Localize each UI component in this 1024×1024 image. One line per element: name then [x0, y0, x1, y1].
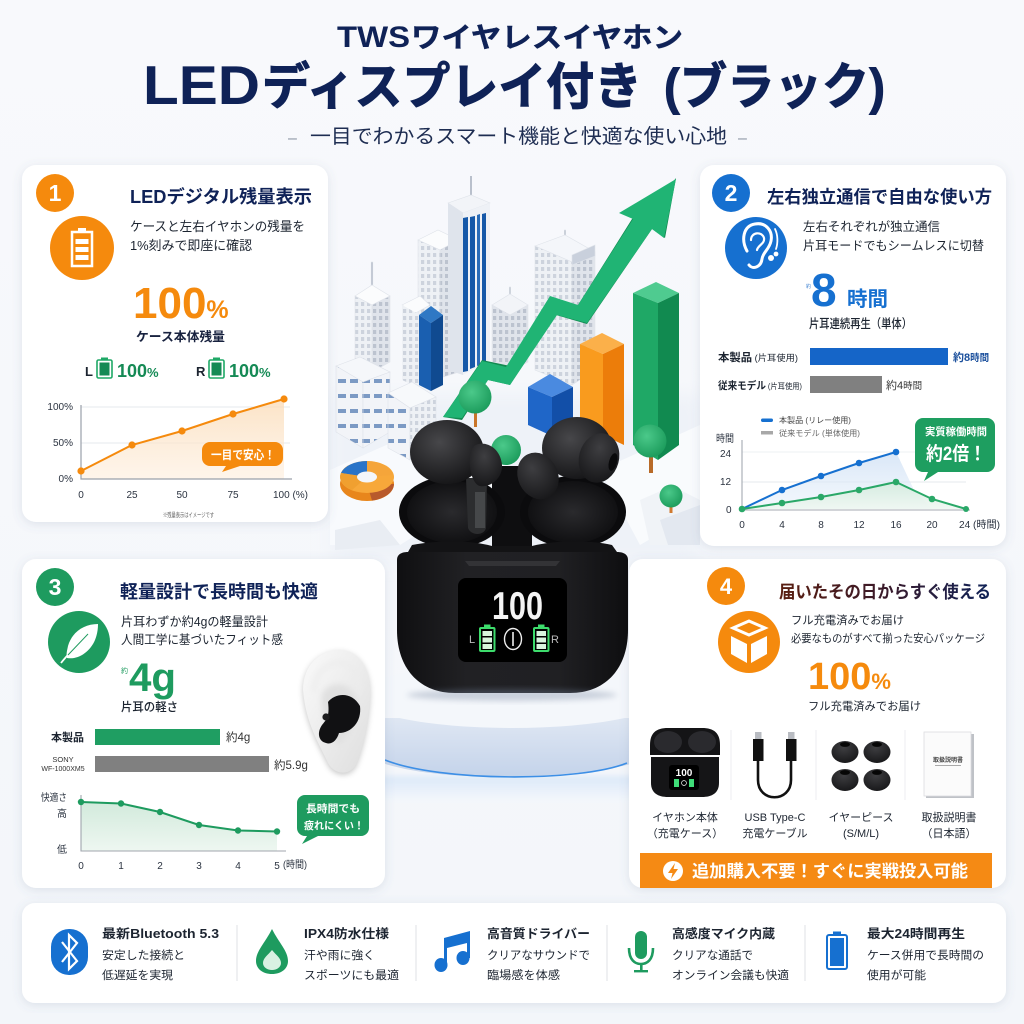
callout 2: 約2倍！: [926, 443, 986, 465]
product: earbuds and charging case: [397, 417, 628, 701]
item: ear tips: [832, 741, 890, 791]
mid tower: [492, 287, 528, 372]
callout 3: 疲れにくい！: [304, 819, 364, 832]
item labels: イヤホン本体: [652, 810, 718, 824]
feature: Bluetooth: 最新Bluetooth 5.3: [102, 926, 219, 941]
LED display: L: [469, 634, 475, 646]
badge 3: 3: [49, 574, 61, 600]
description 2: 左右それぞれが独立通信: [803, 219, 940, 234]
title line 2: ディスプレイ付き: [262, 59, 642, 115]
icon: microphone: [629, 931, 653, 972]
growth arrow: [443, 178, 676, 420]
line chart 2: 24: [720, 449, 732, 460]
icon: lightning: [663, 861, 683, 881]
description 2: 片耳モードでもシームレスに切替: [803, 239, 984, 253]
stat: 100%: 100%: [133, 279, 229, 328]
illustration: ear with earbud: [303, 650, 370, 773]
badge 1: 1: [49, 180, 62, 206]
line chart 1: 75: [227, 490, 239, 501]
feature: waterproof: [256, 926, 400, 982]
line chart 3: 0: [78, 861, 84, 872]
stat label: ケース本体残量: [136, 329, 225, 344]
tree 3: [660, 484, 682, 513]
line chart 2: 0: [739, 520, 745, 531]
line chart 3: 快適さ: [41, 791, 67, 804]
line chart 1: 25: [126, 490, 138, 501]
divider: [606, 925, 608, 981]
description 4: フル充電済みでお届け: [791, 614, 904, 627]
icon: feather: [48, 611, 110, 673]
description 1: 1%刻みで即座に確認: [130, 238, 252, 253]
icon: water drop: [256, 929, 288, 974]
divider: [804, 925, 806, 981]
feature: audio driver: 臨場感を体感: [487, 968, 561, 982]
line chart 2: 20: [926, 520, 938, 531]
bar comparison 2: [718, 348, 989, 393]
callout 2: 実質稼働時間: [925, 425, 987, 438]
line chart 1: 0%: [59, 474, 73, 485]
callout 1: [202, 442, 283, 472]
line chart 3: 2: [157, 861, 163, 872]
tree 1: [458, 380, 492, 427]
big right tower: [535, 230, 595, 385]
bar comparison 2: 約8時間: [953, 350, 989, 364]
feature: waterproof: IPX4防水仕様: [304, 926, 390, 941]
tall blue tower: [448, 176, 490, 375]
left battery: [480, 624, 494, 651]
central city illustration: [330, 176, 700, 560]
line chart 1: 100 (%): [273, 490, 308, 501]
badge 2: 2: [725, 180, 737, 206]
left and right battery readout: 100%: [117, 361, 159, 381]
stat: 8 hours: [806, 264, 888, 316]
stat: 8 hours: 約: [806, 283, 811, 290]
heading 3: 軽量設計で長時間も快適: [120, 582, 318, 602]
bar comparison 3: 本製品: [51, 730, 84, 744]
heading 1: LEDデジタル残量表示: [130, 186, 312, 207]
tree 2: [634, 424, 666, 473]
line chart 3: 5: [274, 861, 280, 872]
feature: Bluetooth: 安定した接続と: [102, 948, 185, 962]
legend: 従来モデル (単体使用): [779, 428, 860, 438]
stat label 4: フル充電済みでお届け: [808, 700, 921, 713]
tower behind: [418, 230, 459, 378]
feature: waterproof: スポーツにも最適: [304, 968, 400, 982]
stat: 4g: 4g: [129, 656, 176, 700]
item labels: 充電ケーブル: [742, 826, 808, 840]
title line 1: ワイヤレスイヤホン: [411, 22, 683, 53]
item labels: （充電ケース）: [647, 827, 723, 840]
legend: 本製品 (リレー使用): [779, 415, 851, 425]
legend: [761, 415, 860, 438]
case lid: [399, 466, 626, 552]
subtitle: 一目でわかるスマート機能と快適な使い心地: [310, 125, 727, 148]
item: manual: 取扱説明書: [933, 756, 963, 764]
icon: battery: [827, 932, 847, 969]
orange bar: [580, 333, 624, 445]
item: earbud case: 100: [676, 768, 693, 779]
left and right battery readout: 100%: [229, 361, 271, 381]
left earbud: [410, 420, 502, 534]
divider: [730, 730, 732, 800]
feature: battery life: 使用が可能: [867, 968, 927, 982]
feature: battery life: ケース併用で長時間の: [867, 948, 984, 962]
stat label 2: 片耳連続再生（単体）: [809, 316, 912, 331]
subtitle: –: [288, 130, 297, 147]
badge 4: 4: [720, 574, 733, 599]
line chart 2: 16: [890, 520, 902, 531]
line chart 1: 0: [78, 490, 84, 501]
left and right battery readout: R: [196, 364, 206, 379]
title line 1: TWS: [337, 21, 410, 54]
footnote: ※残量表示はイメージです: [163, 510, 214, 519]
panel 1: LED digital battery display: [22, 165, 328, 522]
banner: 追加購入不要！すぐに実戦投入可能: [692, 861, 968, 881]
line chart 2: 12: [853, 520, 865, 531]
line chart 2: 8: [818, 520, 824, 531]
bottom feature bar: [22, 903, 1006, 1003]
line chart 2: [716, 415, 1000, 531]
feature: Bluetooth: [51, 926, 219, 982]
stat: 4g: 約: [121, 666, 128, 675]
feature: audio driver: クリアなサウンドで: [487, 949, 590, 962]
divider: [415, 925, 417, 981]
bar comparison 3: [41, 729, 308, 773]
tower with blue block: [402, 296, 443, 391]
icon: bluetooth: [51, 929, 88, 975]
feature: Bluetooth: 低遅延を実現: [102, 969, 174, 982]
tree 4: [491, 435, 521, 465]
green bar: [633, 282, 679, 460]
left and right battery readout: [85, 358, 271, 381]
stat: 8 hours: 8: [811, 264, 837, 316]
stat: 100%: 100%: [808, 656, 891, 698]
callout 3: [297, 795, 369, 844]
callout 2: [915, 418, 995, 481]
ground: [330, 395, 700, 560]
line chart 2: 12: [720, 477, 732, 488]
feature: waterproof: 汗や雨に強く: [304, 949, 375, 962]
feature: audio driver: 高音質ドライバー: [487, 926, 590, 941]
line chart 2: 0: [726, 505, 732, 516]
item labels: （日本語）: [922, 826, 976, 840]
description 3: 人間工学に基づいたフィット感: [121, 632, 283, 647]
callout 3: 長時間でも: [306, 802, 360, 815]
title line 2: LED: [143, 54, 260, 116]
blue cube: [528, 374, 573, 436]
divider: [904, 730, 906, 800]
donut chart: [340, 461, 394, 501]
low building A: [336, 357, 390, 448]
badge 4: [707, 567, 745, 605]
description 3: [121, 614, 283, 647]
bar comparison 2: 本製品 (片耳使用): [718, 350, 798, 364]
line chart 2: 時間: [716, 433, 734, 445]
bar comparison 2: 約4時間: [886, 378, 922, 392]
item labels: イヤーピース: [828, 811, 894, 824]
line chart 1: 50%: [53, 438, 73, 449]
line chart 3: 4: [235, 861, 241, 872]
pedestal: [357, 664, 667, 802]
line chart 1: 100%: [47, 402, 73, 413]
icon: box: [718, 611, 780, 673]
line chart 3: (時間): [283, 859, 307, 871]
description 1: [130, 219, 305, 253]
badge 1: [36, 174, 74, 212]
icon: ear: [725, 217, 787, 279]
icon: music note: [434, 931, 470, 972]
feature: battery life: 最大24時間再生: [867, 926, 965, 941]
divider: [236, 925, 238, 981]
item: manual: [924, 732, 974, 798]
item labels: (S/M/L): [843, 828, 879, 840]
bar comparison 3: 約5.9g: [274, 758, 308, 772]
badge 3: [36, 568, 74, 606]
feature: microphone: 高感度マイク内蔵: [672, 926, 776, 941]
title line 1: [337, 21, 683, 54]
item: earbud case: [650, 728, 720, 797]
line chart 3: 低: [57, 844, 67, 856]
tower left: [355, 262, 390, 372]
bar comparison 2: 従来モデル (片耳使用): [718, 379, 802, 392]
line chart 2: 24 (時間): [959, 519, 1000, 531]
banner: [640, 853, 992, 888]
title line 2: (ブラック): [664, 59, 885, 115]
line chart 1: 50: [176, 490, 188, 501]
panel 3: lightweight design: [22, 559, 385, 888]
feature: microphone: クリアな通話で: [672, 949, 753, 962]
right battery: [534, 624, 548, 651]
divider: [815, 730, 817, 800]
title line 2: [143, 54, 885, 116]
description 3: 片耳わずか約4gの軽量設計: [121, 614, 268, 629]
panel 2: independent left and right: [700, 165, 1006, 546]
bar comparison 3: SONY: [52, 755, 74, 764]
readout: 100: 100: [492, 585, 543, 628]
low building B: [388, 382, 436, 460]
line chart 1: [47, 395, 308, 501]
power symbol: [504, 628, 522, 650]
feature: audio driver: [434, 926, 590, 982]
bar comparison 3: 約4g: [226, 730, 250, 744]
subtitle: –: [738, 130, 747, 147]
bar comparison 3: WF-1000XM5: [41, 766, 85, 773]
LED display: [458, 578, 567, 662]
description 2: [803, 219, 984, 253]
icon: battery: [50, 216, 114, 280]
description 4: 必要なものがすべて揃った安心パッケージ: [791, 631, 985, 645]
callout 1: 一目で安心！: [211, 447, 275, 462]
line chart 3: 高: [57, 807, 67, 820]
description 4: [791, 614, 985, 645]
description 1: ケースと左右イヤホンの残量を: [130, 219, 305, 234]
feature: battery life: [827, 926, 984, 982]
line chart 3: [41, 791, 307, 872]
stat label 3: 片耳の軽さ: [121, 699, 178, 714]
badge 2: [712, 174, 750, 212]
panel 4: ready to use: [629, 559, 1006, 888]
stat: 8 hours: 時間: [847, 288, 888, 311]
item labels: USB Type-C: [745, 812, 806, 824]
line chart 3: 3: [196, 861, 202, 872]
heading 4: 届いたその日からすぐ使える: [779, 582, 991, 602]
title: [143, 21, 885, 148]
item labels: [647, 810, 976, 840]
item: USB cable: [753, 732, 796, 797]
item labels: 取扱説明書: [922, 810, 976, 824]
heading 2: 左右独立通信で自由な使い方: [767, 187, 992, 207]
right earbud: [510, 417, 625, 506]
case body: [397, 541, 628, 701]
left and right battery readout: L: [85, 364, 93, 379]
LED display: R: [551, 634, 559, 646]
line chart 3: 1: [118, 861, 124, 872]
feature: microphone: オンライン会議も快適: [672, 968, 790, 982]
line chart 2: 4: [779, 520, 785, 531]
feature: microphone: [629, 926, 790, 982]
